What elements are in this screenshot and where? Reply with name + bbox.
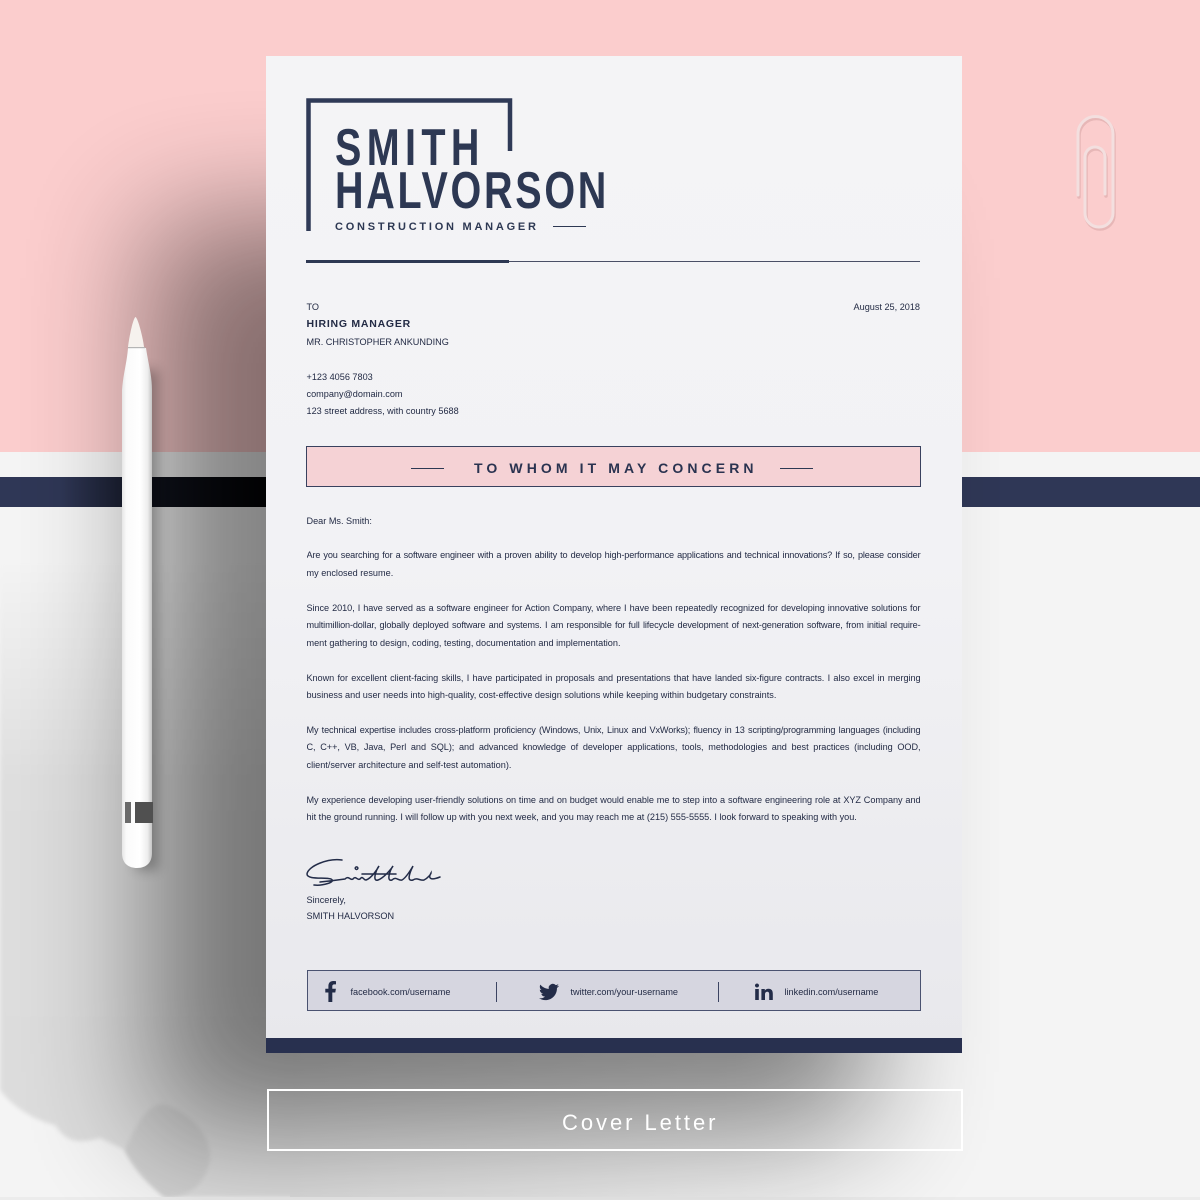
divider: [718, 982, 719, 1002]
letter body: Known for excellent client-facing skills, I have participated in proposals and presentations that have landed six-figure contracts. I also excel in merging: [306, 673, 920, 683]
icon: paper clip: [1076, 115, 1116, 231]
caption box: cover letter: [267, 1089, 963, 1151]
recipient block: 123 street address, with country 5688: [306, 406, 459, 416]
recipient block: company@domain.com: [306, 389, 402, 399]
icon: twitter: [539, 984, 559, 1000]
background: marble surface: [0, 654, 640, 1197]
pencil band: [125, 802, 153, 823]
date: August 25, 2018: [854, 302, 920, 312]
letter body: multimillion-dollar, globally deployed software and systems. I am responsible for full lifecycle development of next-generation software, from initial require-: [306, 620, 920, 630]
letter body: ment gathering to design, coding, testing, documentation and implementation.: [306, 638, 620, 648]
divider: [496, 982, 497, 1002]
sign-off: SMITH HALVORSON: [306, 911, 394, 921]
letter body: My experience developing user-friendly solutions on time and on budget would enable me to step into a software engineering role at XYZ Company and: [306, 795, 920, 805]
recipient block: TO: [306, 302, 319, 312]
sign-off: [306, 895, 394, 921]
letter body: business and user needs into high-quality, cost-effective design solutions while keeping within budgetary constraints.: [306, 690, 776, 700]
subtitle dash: [553, 226, 586, 227]
banner: to whom it may concern: [306, 446, 921, 487]
letter body: My technical expertise includes cross-platform proficiency (Windows, Unix, Linux and VxWorks); fluency in 13 scripting/programming languages (including: [306, 725, 920, 735]
header rule: [306, 260, 920, 263]
facebook label: facebook.com/username: [350, 987, 450, 997]
subtitle: job title: CONSTRUCTION MANAGER: [335, 221, 539, 233]
recipient block: HIRING MANAGER: [306, 318, 411, 330]
paper navy footer band: [266, 1038, 962, 1053]
twitter label: twitter.com/your-username: [570, 987, 678, 997]
caption text: Cover Letter: [562, 1110, 718, 1134]
letter body: client/server architecture and self-test automation).: [306, 760, 511, 770]
letter body: [306, 516, 920, 822]
background: pink band: [0, 0, 1200, 452]
sign-off: Sincerely,: [306, 895, 346, 905]
icon: facebook: [325, 981, 336, 1002]
letter body: hit the ground running. I will follow up with you next week, and you may reach me at (215) 555-5555. I look forward to speaking with you.: [306, 812, 857, 822]
icon: linkedin: [755, 984, 773, 1000]
icon: pencil: [122, 317, 153, 868]
letter body: Are you searching for a software engineer with a proven ability to develop high-performance applications and technical innovations? If so, please consider: [306, 550, 920, 560]
paper drop shadow: [150, 220, 870, 1130]
heading: name: SMITH: [335, 118, 479, 176]
recipient block: [306, 302, 459, 416]
letter body: Since 2010, I have served as a software engineer for Action Company, where I have been repeatedly recognized for developing innovative solutions for: [306, 603, 920, 613]
recipient block: +123 4056 7803: [306, 372, 373, 382]
recipient block: MR. CHRISTOPHER ANKUNDING: [306, 337, 449, 347]
signature: [306, 858, 441, 886]
logo bracket: [306, 98, 512, 231]
icon: pencil shadow: [136, 370, 158, 870]
banner: to whom it may concern: TO WHOM IT MAY CONCERN: [474, 460, 758, 476]
heading: name: [335, 118, 606, 216]
background: white stripe: [0, 452, 1200, 477]
navy stripe darkening near paper: [60, 477, 266, 507]
social bar: [306, 970, 920, 1011]
background: navy stripe: [0, 477, 1200, 507]
letter body: my enclosed resume.: [306, 568, 393, 578]
letter body: C, C++, VB, Java, Perl and SQL); and advanced knowledge of developer applications, tools, methodologies and best practices (including OOD,: [306, 742, 920, 752]
linkedin label: linkedin.com/username: [784, 987, 878, 997]
panel: letter paper: [266, 56, 962, 1053]
letter body: Dear Ms. Smith:: [306, 516, 372, 526]
